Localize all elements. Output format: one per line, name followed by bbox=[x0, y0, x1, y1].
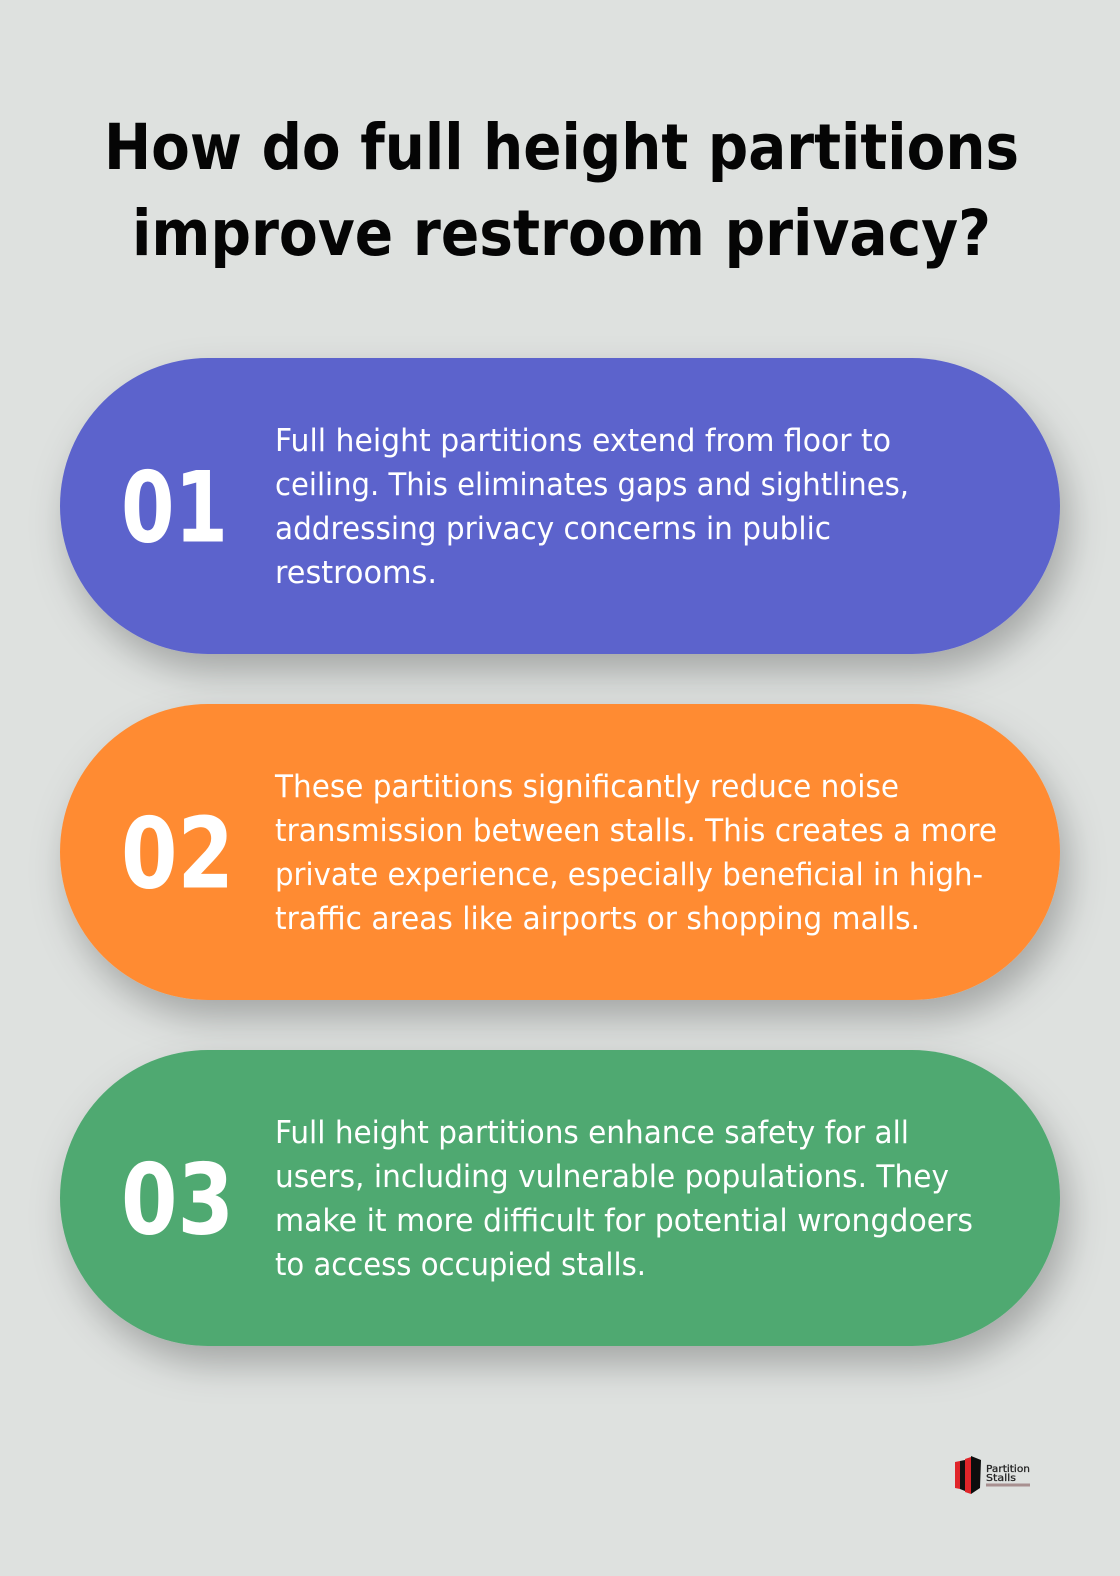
text block 01: ceiling. This eliminates gaps and sightlines, bbox=[275, 467, 909, 503]
logo: Partition Stalls bbox=[955, 1456, 1030, 1494]
wordmark: Stalls bbox=[986, 1473, 1016, 1484]
text block 01 bbox=[275, 423, 909, 591]
panel: step 03 bbox=[60, 1050, 1060, 1346]
text block 03: Full height partitions enhance safety for all bbox=[275, 1115, 909, 1151]
number 03: 03 bbox=[121, 1144, 234, 1258]
wordmark: Partition bbox=[986, 1464, 1030, 1475]
text block 03: make it more difficult for potential wrongdoers bbox=[275, 1203, 973, 1239]
text block 03 bbox=[275, 1115, 973, 1283]
text block 02: transmission between stalls. This creates a more bbox=[275, 813, 997, 849]
title: How do full height partitions bbox=[104, 111, 1019, 184]
title: improve restroom privacy? bbox=[132, 197, 991, 270]
text block 01: Full height partitions extend from floor to bbox=[275, 423, 891, 459]
text block 03: users, including vulnerable populations. They bbox=[275, 1159, 949, 1195]
text block 02: traffic areas like airports or shopping malls. bbox=[275, 901, 920, 937]
title bbox=[104, 111, 1019, 270]
text block 02 bbox=[274, 769, 997, 937]
text block 01: restrooms. bbox=[275, 555, 437, 591]
number 01: 01 bbox=[121, 452, 228, 566]
number 02: 02 bbox=[121, 798, 234, 912]
panel: step 01 bbox=[60, 358, 1060, 654]
text block 02: private experience, especially beneficial in high- bbox=[275, 857, 983, 893]
text block 03: to access occupied stalls. bbox=[275, 1247, 646, 1283]
pill background 01 bbox=[60, 358, 1060, 654]
panel: step 02 bbox=[60, 704, 1060, 1000]
pill background 02 bbox=[60, 704, 1060, 1000]
pill background 03 bbox=[60, 1050, 1060, 1346]
text block 01: addressing privacy concerns in public bbox=[275, 511, 831, 547]
text block 02: These partitions significantly reduce noise bbox=[274, 769, 899, 805]
wordmark bbox=[986, 1464, 1030, 1486]
icon: partition bars bbox=[955, 1456, 981, 1494]
